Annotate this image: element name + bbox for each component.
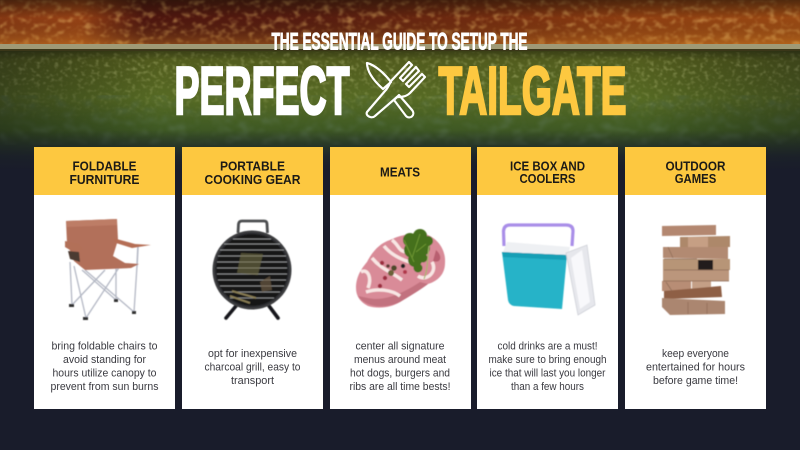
header: portable cooking gear [182,147,323,195]
panel: ice box and coolers [477,147,618,409]
title: tailgate: TAILGATE [438,53,626,129]
header: meats: MEATS [380,164,420,180]
header: ice box and coolers: ICE BOX AND [510,158,585,174]
text: meats: hot dogs, burgers and [350,368,450,380]
title: subtitle line: THE ESSENTIAL GUIDE TO SETUP THE [272,28,528,56]
header: outdoor games: GAMES [675,171,717,186]
text: meats: ribs are all time bests! [350,381,450,393]
text: portable cooking gear: opt for inexpensive [208,348,297,360]
text: outdoor games: keep everyone [662,348,729,360]
icon: wooden block tower [662,225,730,315]
header: foldable furniture [34,147,175,195]
text: ice box and coolers: than a few hours [511,381,584,393]
text: ice box and coolers: ice that will last you longer [490,368,606,380]
text: meats: center all signature [356,340,444,352]
panel: meats [330,147,471,409]
title: perfect: PERFECT [174,53,350,129]
icon: charcoal grill [212,221,292,318]
text: meats: menus around meat [354,354,447,366]
text: outdoor games [646,348,745,387]
text: foldable furniture [50,340,159,393]
text: outdoor games: before game time! [653,375,738,387]
icon: crossed knife and fork [367,62,425,117]
icon: folding chair [65,219,151,320]
text: portable cooking gear: transport [231,375,275,387]
header: ice box and coolers [477,147,618,195]
text: foldable furniture: avoid standing for [63,354,146,366]
icon: cooler [502,225,595,315]
panel: portable cooking gear [182,147,323,409]
text: foldable furniture: hours utilize canopy to [52,368,156,380]
text: portable cooking gear [204,348,300,387]
header: portable cooking gear: COOKING GEAR [204,172,301,187]
text: ice box and coolers: make sure to bring enough [488,354,606,366]
panel: foldable furniture [34,147,175,409]
icon: raw meat with parsley [356,229,445,308]
header: foldable furniture: FOLDABLE [72,158,137,174]
background: stadium and grass [0,0,800,156]
text: outdoor games: entertained for hours [646,362,745,374]
panel: outdoor games [625,147,766,409]
text: foldable furniture: prevent from sun burns [50,381,159,393]
header: foldable furniture: FURNITURE [70,172,140,187]
header: portable cooking gear: PORTABLE [220,158,285,174]
text: portable cooking gear: charcoal grill, easy to [204,362,300,374]
header: outdoor games [625,147,766,195]
text: foldable furniture: bring foldable chairs to [52,340,158,352]
header: outdoor games: OUTDOOR [666,158,726,174]
text: ice box and coolers [488,340,606,393]
title [174,28,626,129]
header: meats [330,147,471,195]
text: ice box and coolers: cold drinks are a must! [498,340,598,352]
header: ice box and coolers: COOLERS [520,171,576,186]
text: meats [350,340,450,393]
